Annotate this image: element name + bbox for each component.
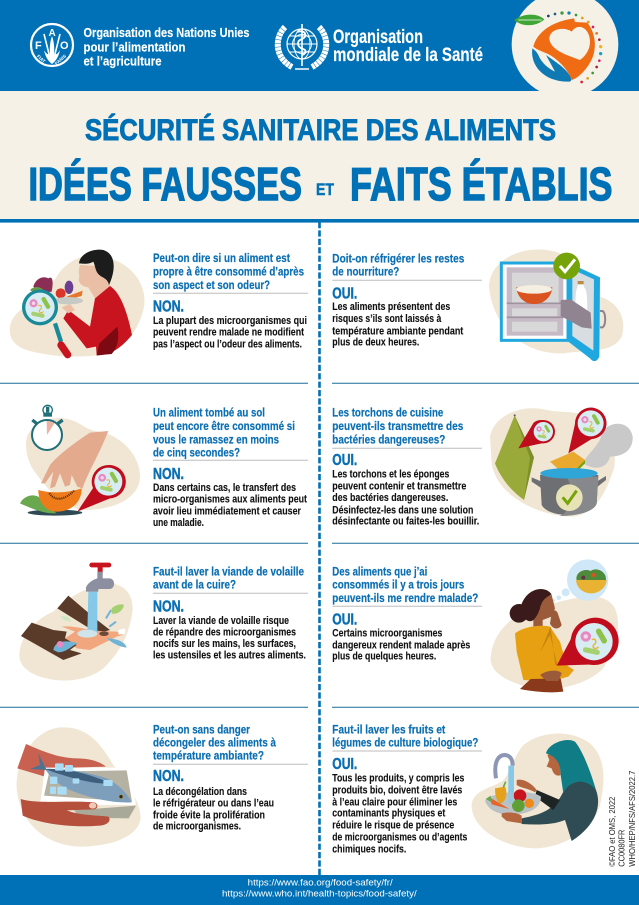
explanation [153,315,307,351]
explanation: de microorganismes. [153,821,241,833]
explanation: risques s’ils sont laissés à [332,313,442,325]
panel: thawing [17,722,308,847]
title line 1: SÉCURITÉ SANITAIRE DES ALIMENTS [85,113,556,147]
panel: appearance and smell [10,250,308,356]
FAO name: pour l’alimentation [84,40,186,54]
question [332,406,464,446]
explanation [153,615,306,662]
WHO name: Organisation [333,27,423,48]
explanation: La plupart des microorganismes qui [153,315,307,327]
answer: NON. [153,599,184,616]
FAO name [84,25,250,68]
title line 2: IDÉES FAUSSES [28,158,302,210]
copyright note: CC0080FR [618,829,626,867]
illustration: man smelling food, magnifier [10,250,144,356]
footer links: https://www.fao.org/food-safety/fr/ [248,878,393,889]
header band [0,0,639,98]
question: Les torchons de cuisine [332,406,444,420]
explanation [332,773,467,855]
explanation: les ustensiles et les autres aliments. [153,650,306,662]
copyright note: WHO/HEP/NFS/AFS/2022.7 [628,770,637,867]
answer: NON. [153,768,184,785]
question [153,406,295,460]
explanation [153,786,274,833]
explanation: pas l’aspect ou l’odeur des aliments. [153,339,302,351]
question [153,565,304,592]
question: Faut-il laver la viande de volaille [153,565,304,579]
explanation [153,482,307,529]
question: de cinq secondes? [153,446,240,460]
question: Peut-on dire si un aliment est [153,251,290,265]
explanation: peuvent rendre malade ne modifient [153,327,304,339]
footer links [222,878,417,900]
explanation: de répandre des microorganismes [153,627,296,639]
explanation: froide évite la prolifération [153,809,265,821]
title line 2 [28,158,612,210]
answer: OUI. [332,611,357,628]
FAO logo: F [35,40,42,52]
explanation: Laver la viande de volaille risque [153,615,289,627]
question: vous le ramassez en moins [153,432,279,446]
explanation: à l’eau claire pour éliminer les [332,797,457,809]
explanation: des bactéries dangereuses. [332,492,448,504]
footer links: https://www.who.int/health-topics/food-safety/ [222,889,417,900]
panel: refrigerating leftovers [332,249,623,361]
FAO logo [31,24,73,66]
illustration: hands under tap [19,563,133,680]
question [153,251,304,292]
illustration: thinking woman [491,559,619,692]
explanation: température ambiante pendant [332,325,464,337]
question: Doit-on réfrigérer les restes [332,251,465,265]
explanation: Les torchons et les éponges [332,468,449,480]
explanation: Certains microorganismes [332,628,442,640]
question: propre à être consommé d’après [153,264,304,278]
explanation: plus de deux heures. [332,336,419,348]
explanation: plus de quelques heures. [332,651,436,663]
question: température ambiante? [153,749,264,763]
question: de nourriture? [332,265,399,279]
answer: OUI. [332,285,357,302]
answer: OUI. [332,452,357,469]
explanation: La décongélation dans [153,786,247,798]
explanation [332,301,464,348]
illustration: woman washing produce [472,733,603,848]
FAO logo: PANIS [54,53,67,66]
panel: five second rule [20,405,308,529]
explanation: produits bio, doivent être lavés [332,785,462,797]
explanation: une maladie. [153,517,204,529]
title line 2: ET [316,180,335,199]
FAO logo: A [48,28,56,39]
question: Peut-on sans danger [153,722,250,736]
copyright note: ©FAO et OMS, 2022 [608,796,617,867]
question: Faut-il laver les fruits et [332,722,445,736]
question: bactéries dangereuses? [332,432,445,446]
question [332,565,478,605]
explanation: le réfrigérateur ou dans l’eau [153,798,274,810]
World Food Safety Day logo [512,0,618,98]
answer: NON. [153,299,184,316]
question [332,251,465,279]
WHO emblem [278,24,326,69]
panel: organic produce [332,722,603,855]
question: décongeler des aliments à [153,735,276,749]
WHO name [333,27,483,66]
panel: food eaten three days ago [332,559,619,692]
question: peuvent-ils transmettre des [332,419,464,433]
explanation: Tous les produits, y compris les [332,773,464,785]
question: peuvent-ils me rendre malade? [332,591,478,605]
FAO name: Organisation des Nations Unies [84,25,250,40]
footer band [0,875,639,905]
question: Un aliment tombé au sol [153,406,265,420]
question: peut encore être consommé si [153,419,295,433]
question: légumes de culture biologique? [332,735,478,749]
illustration: open fridge [489,249,623,361]
answer: NON. [153,466,184,483]
FAO logo: FIAT [36,54,47,64]
WHO name: mondiale de la Santé [333,45,483,66]
explanation [332,468,479,528]
title panel [0,91,639,223]
question: consommés il y a trois jours [332,578,465,592]
question: son aspect et son odeur? [153,278,270,292]
answer: OUI. [332,756,357,773]
explanation: Dans certains cas, le transfert des [153,482,296,494]
FAO name: et l’agriculture [84,54,162,68]
question: Des aliments que j’ai [332,565,427,579]
question [153,722,276,763]
explanation: chimiques nocifs. [332,843,406,855]
explanation [332,628,470,663]
explanation: désinfectante ou faites-les bouillir. [332,516,479,528]
explanation: Les aliments présentent des [332,301,450,313]
explanation: de microorganismes ou d’agents [332,832,467,844]
explanation: avoir lieu immédiatement et causer [153,506,302,518]
explanation: peuvent contenir et transmettre [332,480,466,492]
explanation: Désinfectez-les dans une solution [332,504,474,516]
panel: washing poultry [19,563,308,680]
explanation: micro-organismes aux aliments peut [153,494,307,506]
question: avant de la cuire? [153,578,236,592]
illustration: towel, sponge and boiling pot [490,408,633,517]
explanation: dangereux rendent malade après [332,640,470,652]
copyright note [608,770,637,867]
panel: kitchen towels [332,406,633,528]
question [332,722,478,749]
illustration: stopwatch, hand and papaya [20,405,140,516]
FAO logo: O [60,40,69,52]
explanation: contaminants physiques et [332,808,446,820]
explanation: nocifs sur les mains, les surfaces, [153,638,296,650]
explanation: réduire le risque de présence [332,819,454,831]
illustration: hands holding tray of frozen fish [17,727,141,847]
